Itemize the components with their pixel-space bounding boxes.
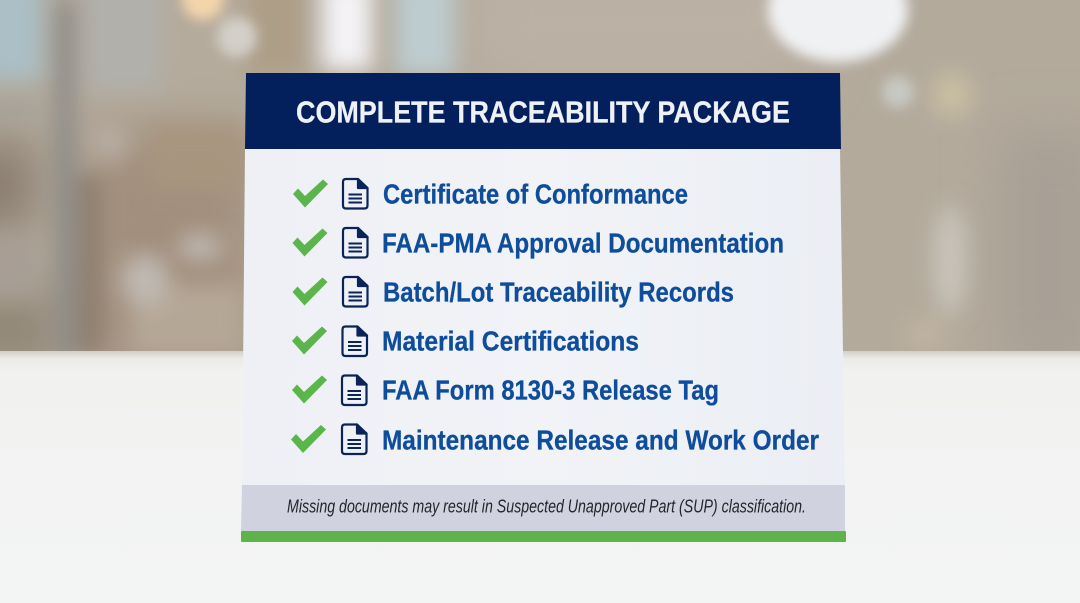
icon: document bbox=[342, 326, 367, 356]
item label: FAA Form 8130-3 Release Tag bbox=[382, 374, 719, 406]
icon: document bbox=[342, 376, 366, 405]
checklist row 3 bbox=[292, 276, 734, 308]
icon: document bbox=[342, 424, 366, 454]
checklist row 5 bbox=[292, 374, 719, 406]
item label: Material Certifications bbox=[382, 326, 639, 356]
footer warning band bbox=[241, 485, 845, 531]
title: COMPLETE TRACEABILITY PACKAGE bbox=[296, 96, 790, 130]
panel: sign card bbox=[241, 73, 846, 542]
green base strip bbox=[241, 531, 846, 542]
icon: document bbox=[343, 179, 368, 208]
checklist row 2 bbox=[292, 228, 784, 258]
icon: green check bbox=[293, 180, 328, 208]
item label: FAA-PMA Approval Documentation bbox=[382, 228, 784, 258]
icon: green check bbox=[292, 326, 327, 354]
icon: green check bbox=[291, 425, 326, 453]
item label: Certificate of Conformance bbox=[383, 178, 688, 210]
icon: green check bbox=[292, 278, 328, 306]
item label: Maintenance Release and Work Order bbox=[382, 424, 819, 456]
icon: document bbox=[343, 228, 368, 258]
icon: green check bbox=[292, 228, 328, 256]
checklist row 1 bbox=[293, 178, 688, 210]
white table surface bbox=[0, 351, 1080, 603]
panel: navy title header bbox=[245, 73, 841, 149]
icon: green check bbox=[292, 376, 327, 404]
icon: document bbox=[343, 277, 368, 306]
checklist row 4 bbox=[292, 326, 639, 356]
item label: Batch/Lot Traceability Records bbox=[383, 276, 734, 308]
card body bbox=[242, 149, 845, 486]
blurred background scene bbox=[0, 0, 1080, 370]
warning text: Missing documents may result in Suspected Unapproved Part (SUP) classification. bbox=[287, 496, 806, 516]
checklist row 6 bbox=[291, 424, 819, 456]
